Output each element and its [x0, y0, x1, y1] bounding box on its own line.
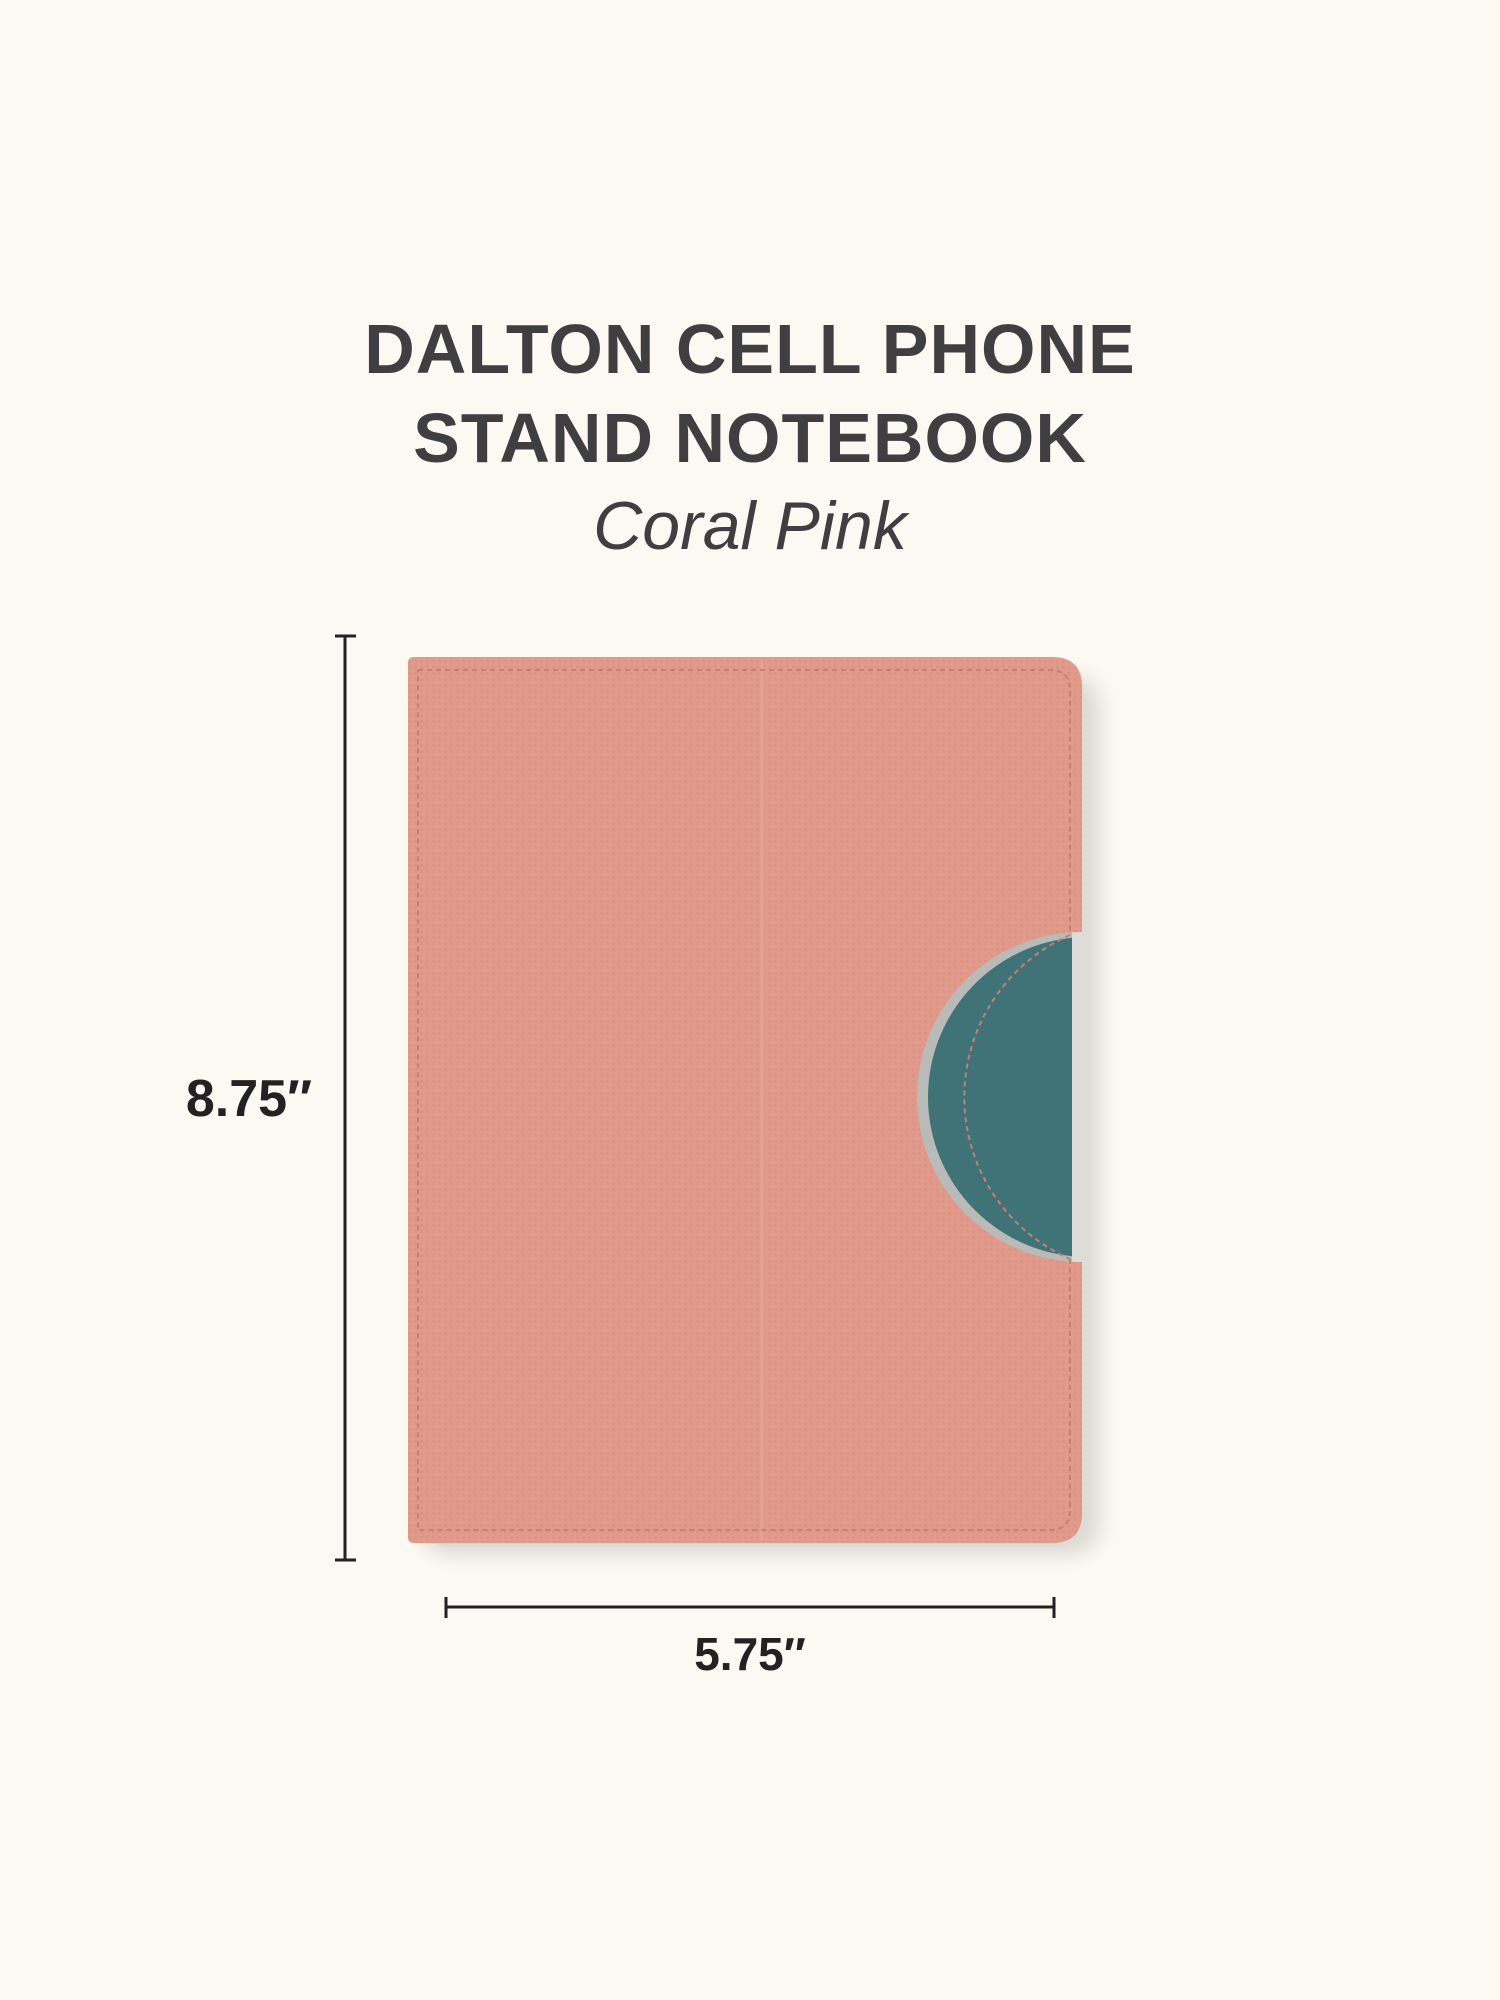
horizontal dimension line [446, 1597, 1054, 1618]
teal stand insert [917, 932, 1072, 1262]
title: DALTON CELL PHONE [364, 310, 1136, 388]
height label: 8.75″ [186, 1070, 312, 1128]
title: STAND NOTEBOOK [413, 399, 1087, 477]
spine crease [760, 660, 764, 1540]
vertical dimension line [335, 636, 356, 1560]
width label: 5.75″ [694, 1628, 806, 1680]
pages edge [420, 665, 1084, 1547]
subtitle: color name: Coral Pink [593, 488, 907, 564]
title [364, 310, 1136, 477]
notebook [408, 657, 1106, 1561]
notebook illustration with dimension lines [335, 634, 1106, 1618]
stitching [418, 670, 1070, 1530]
cover [408, 657, 1082, 1543]
